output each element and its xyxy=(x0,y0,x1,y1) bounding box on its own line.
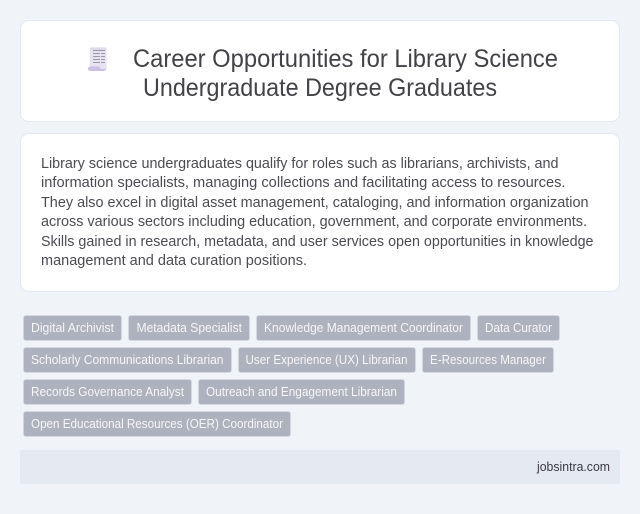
text block: summary paragraph xyxy=(41,156,594,269)
tag: User Experience (UX) Librarian xyxy=(238,348,416,372)
icon: paper scroll document xyxy=(88,47,106,71)
tag: Data Curator: Data Curator xyxy=(485,320,553,335)
tag: Metadata Specialist: Metadata Specialist xyxy=(136,320,242,335)
tag: E-Resources Manager xyxy=(422,348,554,372)
text block: summary paragraph: Library science undergraduates qualify for roles such as librarians, archivists, and xyxy=(41,156,558,172)
tag: Records Governance Analyst: Records Governance Analyst xyxy=(31,384,184,399)
tag: Data Curator xyxy=(478,316,560,340)
tag: Outreach and Engagement Librarian xyxy=(198,380,404,404)
tag: Outreach and Engagement Librarian: Outreach and Engagement Librarian xyxy=(206,384,397,399)
title: Career Opportunities for Library Science xyxy=(133,45,558,73)
footer text: site name: jobsintra.com xyxy=(536,459,610,474)
tag: E-Resources Manager: E-Resources Manager xyxy=(430,352,547,367)
title: Undergraduate Degree Graduates xyxy=(143,74,497,102)
tag: Records Governance Analyst xyxy=(24,380,192,404)
text block: summary paragraph: across various sectors including education, government, and corporate environments. xyxy=(41,214,587,230)
footer bar xyxy=(20,450,620,484)
tag list: career roles xyxy=(24,316,560,436)
text block: summary paragraph: Skills gained in research, metadata, and user services open opportunities in knowledge xyxy=(41,234,594,250)
panel: title card xyxy=(20,20,620,122)
tag: Open Educational Resources (OER) Coordinator: Open Educational Resources (OER) Coordinator xyxy=(31,416,284,431)
title xyxy=(133,45,558,102)
tag: Knowledge Management Coordinator xyxy=(256,316,470,340)
tag: Scholarly Communications Librarian xyxy=(24,348,232,372)
text block: summary paragraph: They also excel in digital asset management, cataloging, and information organization xyxy=(41,195,588,211)
tag: User Experience (UX) Librarian: User Experience (UX) Librarian xyxy=(246,352,408,367)
text block: summary paragraph: management and data curation positions. xyxy=(41,253,307,269)
panel: summary card xyxy=(20,134,620,292)
tag: Digital Archivist xyxy=(24,316,122,340)
tag: Knowledge Management Coordinator: Knowledge Management Coordinator xyxy=(264,320,464,335)
tag: Open Educational Resources (OER) Coordinator xyxy=(24,412,290,436)
tag: Scholarly Communications Librarian: Scholarly Communications Librarian xyxy=(31,352,224,367)
tag: Digital Archivist: Digital Archivist xyxy=(31,320,114,335)
tag: Metadata Specialist xyxy=(128,316,250,340)
text block: summary paragraph: information specialists, managing collections and facilitating access to resources. xyxy=(41,175,566,191)
